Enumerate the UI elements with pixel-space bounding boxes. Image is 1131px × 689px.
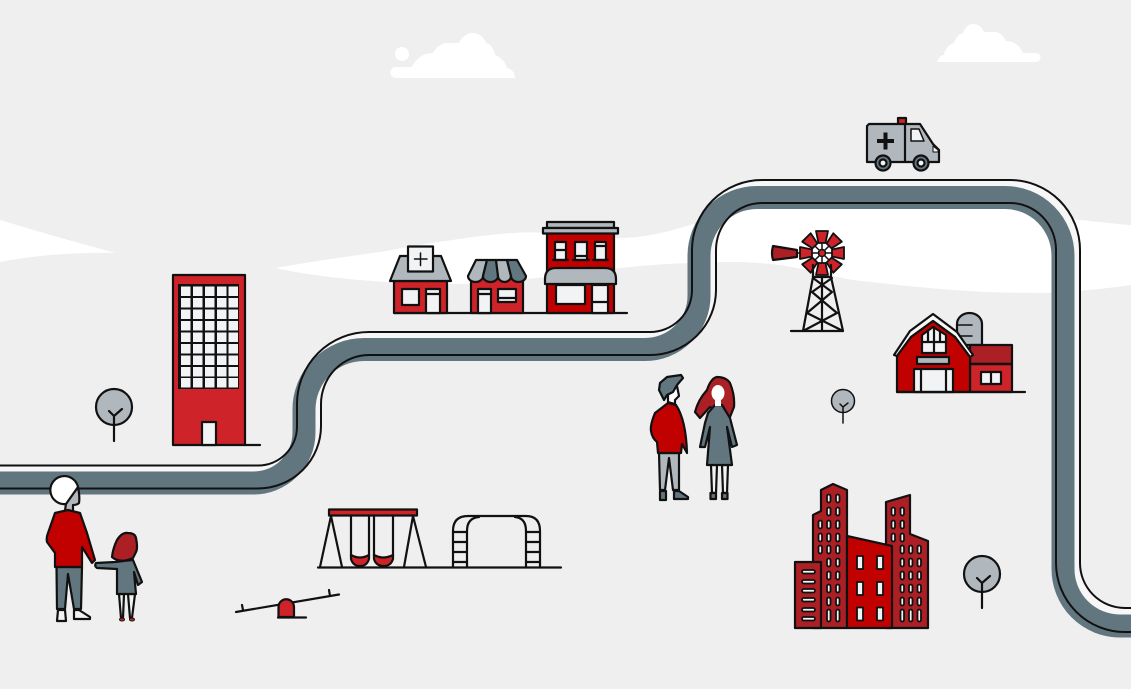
tree right xyxy=(964,556,1000,608)
cloud left xyxy=(390,33,515,78)
background: white hills xyxy=(0,195,1131,293)
office tower xyxy=(173,275,260,445)
person: man in couple xyxy=(651,375,688,500)
road xyxy=(0,180,1131,632)
person: adult holding child's hand xyxy=(47,476,95,621)
seesaw xyxy=(236,590,339,618)
tree left xyxy=(96,389,132,441)
person: woman in couple xyxy=(695,377,737,499)
tree middle xyxy=(832,390,854,423)
main street ground line xyxy=(394,312,627,314)
windmill xyxy=(772,231,844,331)
playground climbing arch xyxy=(453,516,540,567)
ambulance xyxy=(867,118,939,170)
brick storefront xyxy=(543,222,618,313)
corner shop xyxy=(468,260,526,313)
playground swing set xyxy=(318,510,561,568)
clinic building xyxy=(390,246,451,313)
person: child with red hair xyxy=(95,533,142,621)
barn with silo xyxy=(894,313,1025,392)
cloud right xyxy=(937,24,1040,62)
city skyline xyxy=(795,484,928,628)
